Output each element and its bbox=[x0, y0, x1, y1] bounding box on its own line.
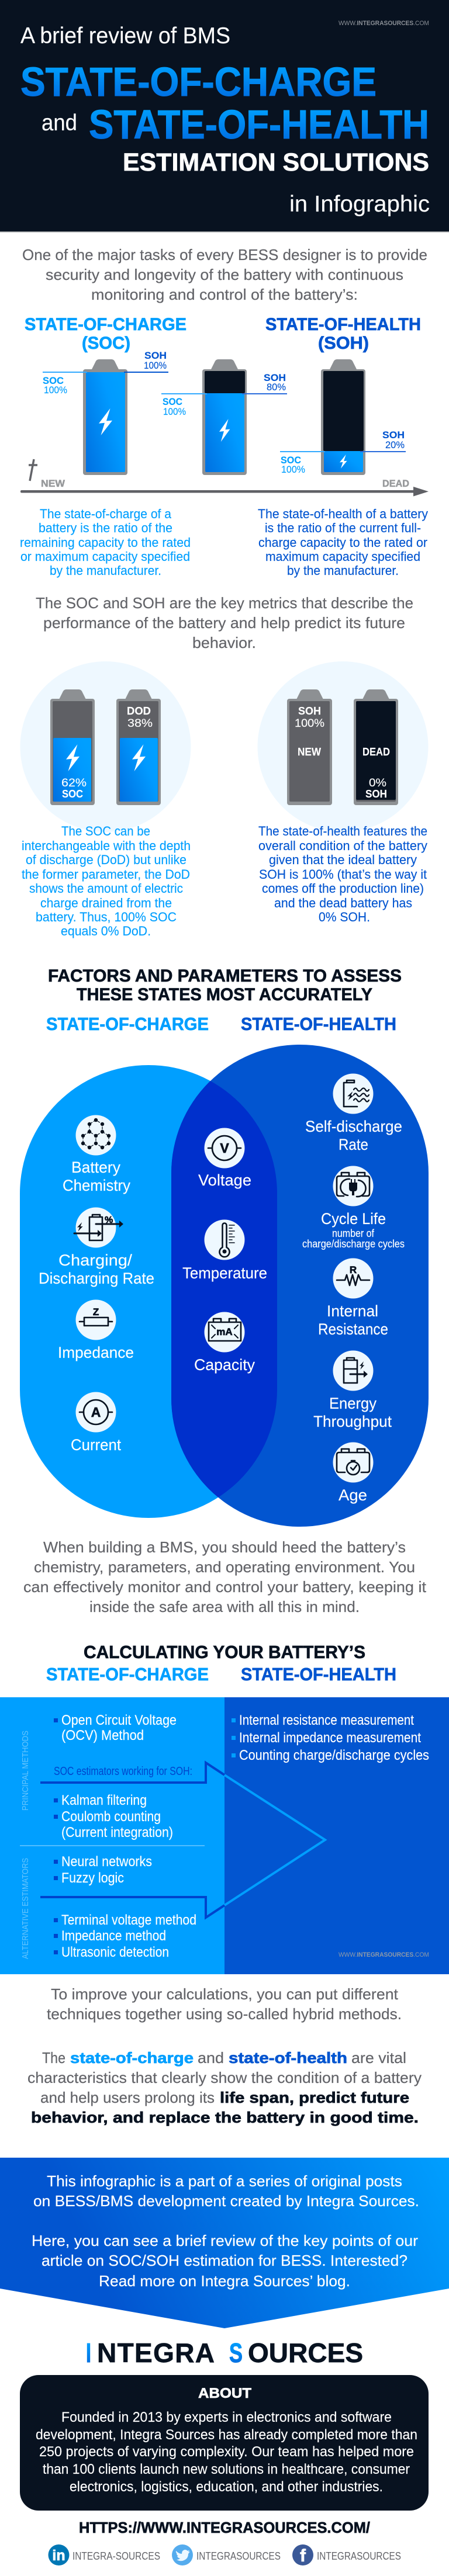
text: SOH overall condition: SOH is 100% (that’s the way it bbox=[259, 867, 427, 882]
label: SOH 20%: SOH bbox=[382, 429, 405, 441]
panel: about this infographic: article on SOC/SOH estimation for BESS. Interested? bbox=[42, 2252, 407, 2269]
subheading: state-of-charge: STATE-OF-CHARGE bbox=[46, 1014, 209, 1034]
logo: Integra Sources bbox=[86, 2338, 363, 2368]
item: impedance: Z bbox=[93, 1306, 99, 1318]
header banner bbox=[0, 0, 449, 233]
text: conclusion: state-of-health bbox=[229, 2049, 347, 2067]
list: principal methods: Kalman filtering bbox=[61, 1793, 147, 1808]
item: energy throughput: Throughput bbox=[313, 1413, 392, 1430]
vertical label: alternative estimators: ALTERNATIVE ESTIMATORS bbox=[20, 1858, 30, 1959]
text: SOH overall condition: The state-of-health features the bbox=[258, 824, 427, 838]
label: SOH 100%: 100% bbox=[144, 360, 167, 371]
heading: factors and parameters bbox=[48, 966, 402, 1004]
panel: about this infographic bbox=[0, 2158, 449, 2328]
text: SOH definition: maximum capacity specified bbox=[265, 549, 420, 564]
title: in infographic: in Infographic bbox=[289, 192, 430, 217]
text: SOC definition: remaining capacity to the rated bbox=[20, 535, 191, 550]
text: SOC definition bbox=[20, 507, 191, 578]
text: conclusion: The bbox=[42, 2049, 65, 2067]
heading: about: ABOUT bbox=[198, 2386, 251, 2401]
text: SOC and DoD: shows the amount of electric bbox=[29, 881, 183, 896]
panel: about this infographic: Here, you can see a brief review of the key points of our bbox=[32, 2232, 418, 2249]
website tag: WWW.INTEGRASOURCES.COM bbox=[339, 1951, 429, 1958]
battery: 62% SOC bbox=[50, 689, 95, 805]
list: principal methods: (Current integration) bbox=[61, 1825, 173, 1840]
item: impedance: Impedance bbox=[58, 1344, 134, 1361]
text: SOH overall condition: 0% SOH. bbox=[319, 910, 370, 924]
item: charging/discharging rate bbox=[39, 1207, 154, 1287]
list: SOH methods: Counting charge/discharge cycles bbox=[239, 1748, 429, 1763]
text: SOH definition: The state-of-health of a battery bbox=[258, 507, 428, 521]
battery: dead: DEAD bbox=[362, 746, 390, 758]
item: charging/discharging rate: Charging/ bbox=[58, 1251, 133, 1269]
heading: factors and parameters: THESE STATES MOST ACCURATELY bbox=[77, 985, 372, 1004]
label: SOC 100% first: SOC bbox=[43, 375, 64, 386]
text: about description: development, Integra Sources has already completed more than bbox=[36, 2427, 417, 2443]
item: voltage bbox=[198, 1128, 251, 1189]
intro text: monitoring and control of the battery’s: bbox=[91, 286, 358, 303]
label: SOH 80%: SOH bbox=[264, 372, 286, 383]
social: linkedin: in bbox=[52, 2547, 65, 2564]
list: SOH methods: Internal impedance measurement bbox=[239, 1730, 421, 1746]
heading: state-of-health (SOH): STATE-OF-HEALTH bbox=[265, 315, 421, 334]
list: alternative estimators bbox=[54, 1854, 196, 1960]
text: SOH overall condition: and the dead battery has bbox=[274, 896, 412, 910]
label: SOH 100% bbox=[124, 350, 168, 373]
text: SOC and DoD: of discharge (DoD) but unlike bbox=[26, 852, 186, 867]
item: charging/discharging rate: Discharging Rate bbox=[39, 1270, 154, 1287]
text: hybrid methods: To improve your calculations, you can put different bbox=[51, 1985, 399, 2003]
text: hybrid methods: techniques together using so-called hybrid methods. bbox=[47, 2005, 402, 2023]
text: SOC definition: or maximum capacity specified bbox=[20, 549, 190, 564]
text: conclusion: and help users prolong its bbox=[40, 2089, 215, 2106]
panel: SOH new vs dead batteries bbox=[257, 661, 428, 832]
label: SOC 100% first bbox=[43, 372, 87, 396]
text: hybrid methods bbox=[47, 1985, 402, 2023]
list: principal methods: Coulomb counting bbox=[61, 1809, 161, 1825]
website tag: WWW.INTEGRASOURCES.COM bbox=[339, 20, 429, 27]
battery: new bbox=[287, 689, 332, 805]
title: state-of-charge: STATE-OF-CHARGE bbox=[20, 59, 377, 105]
text: SOC and DoD: battery. Thus, 100% SOC bbox=[36, 910, 177, 924]
text: about description bbox=[36, 2409, 417, 2495]
item: energy throughput bbox=[313, 1351, 392, 1430]
label: SOC 100% second: SOC bbox=[163, 396, 182, 407]
label: SOH 80%: 80% bbox=[267, 382, 286, 393]
panel: estimation methods bbox=[0, 1697, 449, 1974]
battery: new: 100% bbox=[295, 717, 324, 730]
panel: about this infographic: Read more on Integra Sources’ blog. bbox=[99, 2272, 350, 2290]
item: age: Age bbox=[339, 1486, 367, 1504]
list: principal methods bbox=[54, 1793, 173, 1840]
text: SOC definition: The state-of-charge of a bbox=[40, 507, 172, 521]
text: conclusion: are vital bbox=[351, 2049, 406, 2067]
heading: state-of-charge (SOC): (SOC) bbox=[82, 334, 130, 353]
battery: 38% DOD: DOD bbox=[127, 705, 151, 717]
label: SOC 100% first: 100% bbox=[44, 384, 67, 396]
social: twitter bbox=[172, 2544, 281, 2565]
text: SOH overall condition: given that the ideal battery bbox=[269, 852, 417, 867]
text: building a BMS: When building a BMS, you should heed the battery’s bbox=[43, 1538, 406, 1556]
battery: 38% DOD: 38% bbox=[127, 717, 153, 730]
label: SOC 100% third: 100% bbox=[281, 464, 305, 475]
item: charging/discharging rate: % bbox=[105, 1215, 113, 1225]
text: building a BMS bbox=[23, 1538, 427, 1615]
text: SOH overall condition bbox=[258, 824, 427, 924]
label: new: NEW bbox=[41, 478, 65, 489]
label: SOH 80% bbox=[242, 372, 287, 394]
item: current: Current bbox=[71, 1436, 121, 1454]
item: cycle life: number of bbox=[332, 1228, 375, 1239]
text: SOC and DoD: equals 0% DoD. bbox=[61, 924, 151, 938]
label: SOC 100% second: 100% bbox=[163, 406, 186, 417]
intro text bbox=[22, 246, 427, 303]
battery: 62% SOC: SOC bbox=[62, 788, 83, 800]
chart: battery aging timeline bbox=[20, 350, 429, 497]
item: internal resistance bbox=[318, 1258, 388, 1338]
text: building a BMS: can effectively monitor and control your battery, keeping it bbox=[23, 1578, 427, 1596]
intro text: security and longevity of the battery with continuous bbox=[46, 266, 403, 283]
item: capacity: mA bbox=[216, 1326, 233, 1337]
list: OCV method: Open Circuit Voltage bbox=[61, 1712, 177, 1728]
item: current: A bbox=[91, 1405, 101, 1420]
battery: new, 100% SOH bbox=[83, 359, 127, 475]
item: voltage: Voltage bbox=[198, 1171, 251, 1189]
label: SOH 20%: 20% bbox=[385, 439, 405, 450]
label: dead: DEAD bbox=[382, 478, 409, 489]
item: self-discharge rate: Self-discharge bbox=[305, 1118, 402, 1135]
social: facebook: f bbox=[300, 2546, 306, 2565]
item: cycle life: charge/discharge cycles bbox=[302, 1238, 405, 1250]
text: about description: 250 projects of varying complexity. Our team has helped more bbox=[39, 2444, 414, 2460]
heading: state-of-health (SOH) bbox=[265, 315, 421, 353]
item: temperature bbox=[182, 1220, 267, 1282]
text: SOC and DoD: interchangeable with the depth bbox=[22, 838, 191, 853]
panel: SOC vs DoD batteries bbox=[20, 661, 191, 832]
text: conclusion: behavior, and replace the battery in good time. bbox=[31, 2109, 419, 2126]
subheading: state-of-charge: STATE-OF-CHARGE bbox=[46, 1664, 209, 1684]
logo: Integra Sources: OURCES bbox=[248, 2338, 363, 2368]
list: OCV method bbox=[54, 1712, 177, 1743]
social: linkedin: INTEGRA-SOURCES bbox=[72, 2550, 160, 2562]
item: battery chemistry bbox=[63, 1115, 130, 1194]
text: SOH definition: charge capacity to the rated or bbox=[258, 535, 427, 550]
label: SOC 100% third: SOC bbox=[281, 455, 301, 466]
battery: 62% SOC: 62% bbox=[61, 777, 87, 789]
item: battery chemistry: Battery bbox=[71, 1159, 120, 1176]
text: SOC and DoD: The SOC can be bbox=[61, 824, 150, 838]
battery: dead bbox=[354, 689, 398, 805]
text: SOC definition: battery is the ratio of the bbox=[39, 521, 172, 535]
item: age bbox=[333, 1442, 373, 1504]
item: battery chemistry: Chemistry bbox=[63, 1177, 130, 1194]
battery: 20% SOH bbox=[321, 359, 365, 475]
social: facebook: INTEGRASOURCES bbox=[317, 2550, 401, 2562]
text: conclusion bbox=[27, 2049, 422, 2126]
intro text: One of the major tasks of every BESS designer is to provide bbox=[22, 246, 427, 264]
battery: new: NEW bbox=[298, 746, 321, 758]
logo: Integra Sources: NTEGRA bbox=[97, 2338, 215, 2368]
label: SOH 100%: SOH bbox=[144, 350, 167, 361]
label: SOC 100% second bbox=[161, 393, 207, 417]
panel: about this infographic: on BESS/BMS development created by Integra Sources. bbox=[33, 2192, 419, 2210]
heading: state-of-charge (SOC): STATE-OF-CHARGE bbox=[25, 315, 186, 334]
arrow: SOC estimators to SOH bbox=[40, 1763, 325, 1918]
subheading: state-of-health: STATE-OF-HEALTH bbox=[241, 1014, 396, 1034]
icon: time symbol t bbox=[29, 459, 37, 481]
title: and: and bbox=[42, 110, 77, 136]
text: SOC and DoD: the former parameter, the DoD bbox=[22, 867, 190, 882]
logo: Integra Sources: S bbox=[229, 2338, 243, 2368]
item: self-discharge rate bbox=[305, 1074, 402, 1153]
text: SOH definition: by the manufacturer. bbox=[287, 563, 399, 578]
label: SOC 100% third bbox=[280, 451, 325, 475]
text: SOH definition bbox=[258, 507, 428, 578]
item: internal resistance: R bbox=[350, 1264, 357, 1275]
title: estimation solutions: ESTIMATION SOLUTIONS bbox=[123, 148, 429, 176]
heading: factors and parameters: FACTORS AND PARAMETERS TO ASSESS bbox=[48, 966, 402, 986]
text: conclusion: and bbox=[198, 2049, 224, 2067]
text: SOC and DoD bbox=[22, 824, 191, 938]
link: website URL: HTTPS://WWW.INTEGRASOURCES.COM/ bbox=[79, 2519, 370, 2536]
social: facebook bbox=[292, 2544, 401, 2565]
text: building a BMS: chemistry, parameters, and operating environment. You bbox=[34, 1558, 415, 1576]
text: key metrics: behavior. bbox=[192, 634, 256, 651]
battery: 80% SOH bbox=[202, 359, 247, 475]
item: internal resistance: Internal bbox=[327, 1302, 378, 1320]
panel: about bbox=[20, 2375, 429, 2511]
text: SOC and DoD: charge drained from the bbox=[40, 896, 172, 910]
item: temperature: Temperature bbox=[182, 1264, 267, 1282]
text: about description: electronics, logistics, education, and other industries. bbox=[70, 2479, 383, 2495]
arrow: timeline bbox=[20, 487, 429, 497]
social: linkedin bbox=[48, 2544, 160, 2565]
logo: Integra Sources: I bbox=[86, 2338, 91, 2368]
item: impedance bbox=[58, 1299, 134, 1361]
text: SOH definition: is the ratio of the current full- bbox=[265, 521, 421, 535]
text: key metrics: performance of the battery and help predict its future bbox=[43, 614, 405, 632]
list: alternative estimators: Terminal voltage method bbox=[61, 1912, 196, 1928]
battery: dead: 0% bbox=[369, 777, 386, 789]
text: SOC definition: by the manufacturer. bbox=[50, 563, 161, 578]
list: OCV method: (OCV) Method bbox=[61, 1728, 144, 1743]
text: building a BMS: inside the safe area with all this in mind. bbox=[89, 1598, 360, 1615]
item: self-discharge rate: Rate bbox=[339, 1136, 368, 1153]
heading: state-of-charge (SOC) bbox=[25, 315, 186, 353]
list: alternative estimators: Fuzzy logic bbox=[61, 1870, 124, 1886]
item: capacity: Capacity bbox=[194, 1356, 255, 1374]
battery: new: SOH bbox=[298, 705, 321, 717]
vertical label: principal methods: PRINCIPAL METHODS bbox=[20, 1731, 30, 1811]
item: capacity bbox=[194, 1312, 255, 1374]
social: twitter: INTEGRASOURCES bbox=[196, 2550, 281, 2562]
item: current bbox=[71, 1392, 121, 1454]
text: conclusion: characteristics that clearly show the condition of a battery bbox=[27, 2069, 422, 2086]
text: SOH overall condition: comes off the production line) bbox=[262, 881, 424, 896]
text: key metrics: The SOC and SOH are the key metrics that describe the bbox=[36, 594, 413, 612]
list: SOH methods: Internal resistance measurement bbox=[239, 1712, 414, 1728]
battery: dead: SOH bbox=[365, 788, 387, 800]
venn diagram: factors bbox=[20, 1045, 429, 1527]
item: voltage: V bbox=[220, 1140, 229, 1156]
list: SOH methods bbox=[232, 1712, 429, 1763]
text: key metrics bbox=[36, 594, 413, 651]
text: conclusion: state-of-charge bbox=[70, 2049, 194, 2067]
text: about description: than 100 clients launch new solutions in healthcare, consumer bbox=[43, 2461, 410, 2477]
heading: state-of-health (SOH): (SOH) bbox=[318, 334, 369, 353]
list: alternative estimators: Ultrasonic detection bbox=[61, 1944, 169, 1960]
item: internal resistance: Resistance bbox=[318, 1320, 388, 1338]
subheading: state-of-health: STATE-OF-HEALTH bbox=[241, 1664, 396, 1684]
text: SOH overall condition: overall condition of the battery bbox=[258, 838, 427, 853]
list: alternative estimators: Impedance method bbox=[61, 1928, 166, 1944]
heading: calculating your battery's: CALCULATING YOUR BATTERY’S bbox=[84, 1642, 365, 1662]
list: alternative estimators: Neural networks bbox=[61, 1854, 152, 1870]
title line: a brief review: A brief review of BMS bbox=[20, 23, 230, 48]
label: SOH 20% bbox=[360, 429, 406, 452]
item: cycle life: Cycle Life bbox=[321, 1210, 386, 1228]
battery: 38% DOD bbox=[116, 689, 161, 805]
caption: SOC estimators working for SOH: SOC estimators working for SOH: bbox=[54, 1765, 192, 1778]
panel: about this infographic: This infographic is a part of a series of original posts bbox=[47, 2172, 402, 2190]
item: energy throughput: Energy bbox=[329, 1395, 377, 1412]
text: conclusion: life span, predict future bbox=[220, 2089, 409, 2106]
text: about description: Founded in 2013 by experts in electronics and software bbox=[61, 2409, 392, 2425]
item: cycle life bbox=[302, 1166, 405, 1250]
